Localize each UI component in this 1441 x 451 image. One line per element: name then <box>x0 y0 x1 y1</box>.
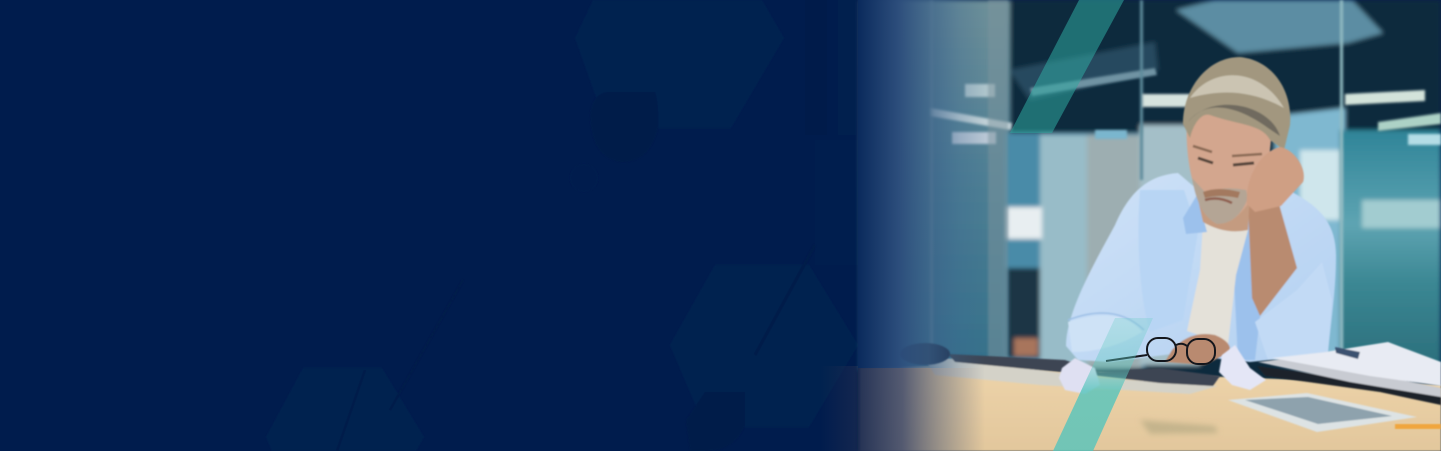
beard <box>1192 178 1248 224</box>
teal stripe bottom <box>1053 318 1153 451</box>
eyes <box>1198 158 1254 165</box>
office background <box>860 0 1441 451</box>
hair <box>1183 57 1290 150</box>
face <box>1187 108 1272 223</box>
blurred pen on desk <box>1140 420 1218 434</box>
teal stripe top <box>1010 0 1124 133</box>
hand <box>1247 147 1304 212</box>
desk fade overlay <box>858 368 985 451</box>
man <box>1066 57 1336 365</box>
mouth <box>1205 199 1232 203</box>
folded hands <box>1165 334 1230 365</box>
left fade overlay <box>858 0 985 368</box>
office photo scene <box>860 0 1441 451</box>
desk <box>860 366 1441 451</box>
shirt <box>1066 173 1336 362</box>
rolled sleeve <box>1255 262 1332 360</box>
forearm <box>1248 204 1297 316</box>
glasses <box>1106 338 1215 364</box>
keyboard <box>927 354 1220 394</box>
neck <box>1197 190 1250 231</box>
pencil <box>1395 424 1441 429</box>
crumpled paper right <box>1219 345 1266 390</box>
mouse <box>900 343 950 365</box>
crumpled paper left <box>1059 358 1100 394</box>
shirt folds <box>1138 190 1198 332</box>
dark window frames behind fade <box>805 0 860 451</box>
collar <box>1183 195 1207 234</box>
t-shirt <box>1187 222 1248 345</box>
ceiling lights <box>930 0 1441 360</box>
notebook <box>1257 342 1441 405</box>
tablet <box>1228 393 1417 432</box>
decorative hexagons <box>266 0 858 451</box>
